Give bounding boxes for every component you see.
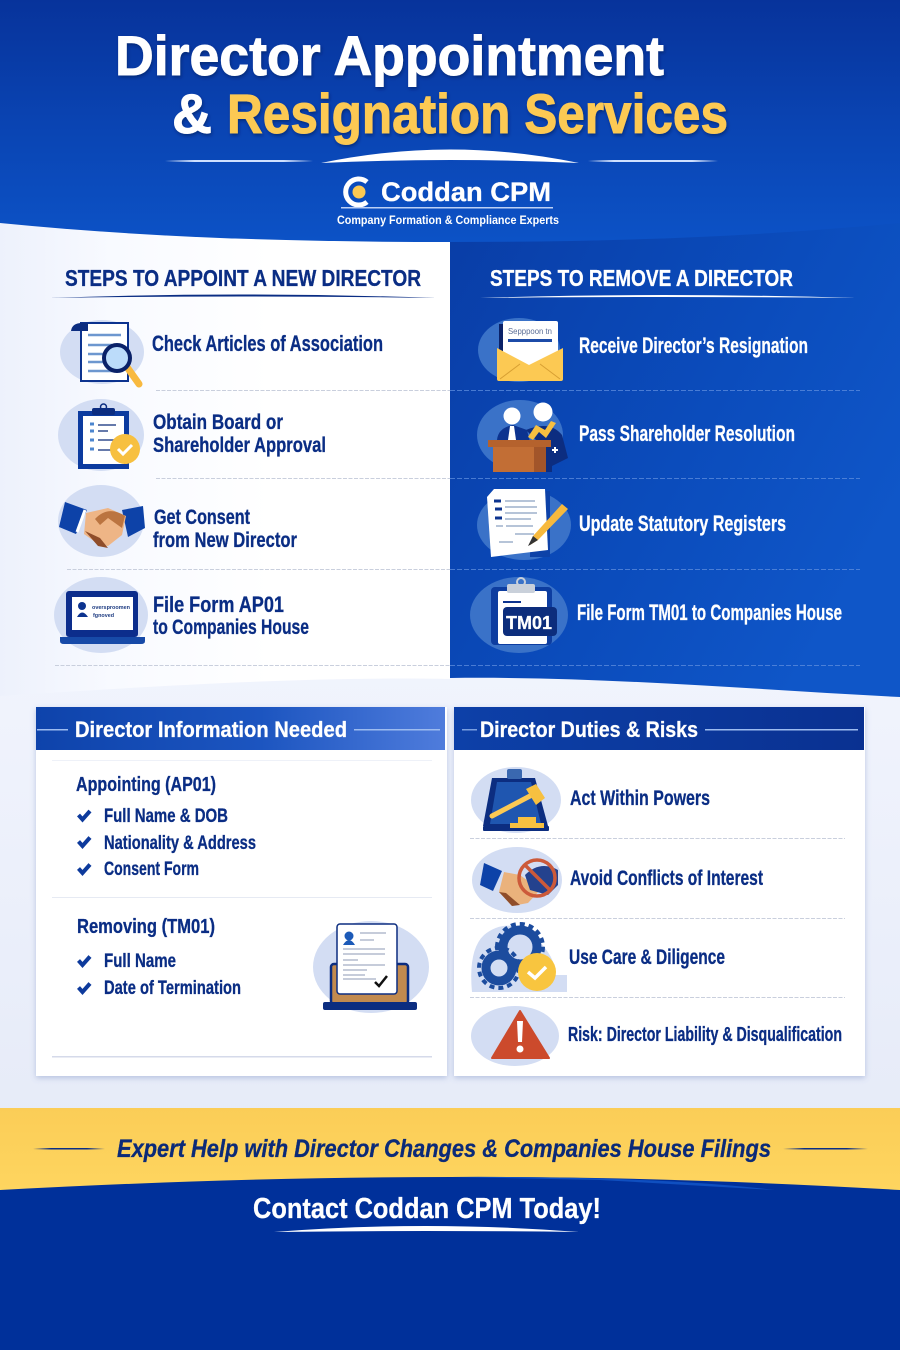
icon: laptop form: fgnoved xyxy=(93,613,114,619)
title line 2: Resignation Services xyxy=(227,82,728,145)
text: act within powers: Act Within Powers xyxy=(570,787,710,810)
text: obtain approval xyxy=(153,410,326,457)
checklist: appointing: Nationality & Address xyxy=(104,833,256,854)
icon: laptop form: oversproomen xyxy=(92,605,131,611)
panel: director information needed xyxy=(36,707,447,1076)
banner: expert help: Expert Help with Director Changes & Companies House Filings xyxy=(117,1135,771,1163)
panel header xyxy=(454,707,864,750)
text: get consent xyxy=(153,505,297,552)
icon: TM01 clipboard xyxy=(470,577,568,653)
subheading: removing: Removing (TM01) xyxy=(77,916,215,938)
text: pass resolution: Pass Shareholder Resolution xyxy=(579,421,795,446)
heading: remove: STEPS TO REMOVE A DIRECTOR xyxy=(490,265,793,291)
checklist: appointing: Consent Form xyxy=(104,859,199,880)
icon: document and magnifier xyxy=(60,320,144,384)
call to action: Contact Coddan CPM Today! xyxy=(253,1193,601,1225)
footer blue xyxy=(0,1170,900,1350)
panel header: Director Duties & Risks xyxy=(480,717,698,742)
icon: envelope: Sepppoon tn xyxy=(508,326,552,336)
text: obtain approval: Obtain Board or xyxy=(153,410,283,434)
text: get consent: from New Director xyxy=(153,528,297,552)
panel header: Director Information Needed xyxy=(75,717,347,742)
checklist: removing: Full Name xyxy=(104,951,176,972)
icon: laptop form xyxy=(54,577,148,653)
title xyxy=(115,24,728,145)
icon: TM01 clipboard: TM01 xyxy=(506,613,552,633)
text: obtain approval: Shareholder Approval xyxy=(153,433,326,457)
background: light lower section xyxy=(0,660,900,1130)
logo wordmark: Coddan CPM xyxy=(381,177,551,207)
card background xyxy=(454,707,865,1076)
text: use care: Use Care & Diligence xyxy=(569,946,725,969)
text: file AP01: to Companies House xyxy=(153,615,309,639)
header background xyxy=(0,0,900,242)
logo tagline: Company Formation & Compliance Experts xyxy=(337,213,559,227)
icon: CV on laptop xyxy=(313,921,429,1013)
text: receive resignation: Receive Director’s Resignation xyxy=(579,333,808,358)
panel: director duties and risks xyxy=(454,707,865,1076)
heading: appoint: STEPS TO APPOINT A NEW DIRECTOR xyxy=(65,265,421,291)
panel: appoint steps background xyxy=(0,215,450,696)
checklist: appointing xyxy=(78,806,256,880)
icon: warning triangle xyxy=(471,1006,559,1066)
checklist: removing xyxy=(78,951,241,999)
text: file AP01: File Form AP01 xyxy=(153,592,284,617)
panel: steps to remove xyxy=(450,265,860,666)
text: file AP01 xyxy=(153,592,309,639)
title ampersand: & xyxy=(172,82,212,145)
text: update registers: Update Statutory Registers xyxy=(579,511,786,536)
icon: handshake with prohibition xyxy=(472,847,562,913)
icon: shareholders at podium xyxy=(477,400,568,472)
panel: remove steps background xyxy=(450,215,900,697)
banner: expert help xyxy=(0,1108,900,1190)
card background xyxy=(36,707,447,1076)
icon: handshake xyxy=(58,485,145,557)
text: check articles: Check Articles of Association xyxy=(152,331,383,356)
logo: Coddan CPM xyxy=(337,177,559,227)
text: get consent: Get Consent xyxy=(154,505,250,529)
title divider xyxy=(165,150,718,163)
icon: gears and check xyxy=(471,924,567,992)
icon: gavel xyxy=(471,767,561,833)
icon: register and pen xyxy=(477,489,571,560)
icon: clipboard approval xyxy=(58,399,144,471)
checklist: appointing: Full Name & DOB xyxy=(104,806,228,827)
text: avoid conflicts: Avoid Conflicts of Interest xyxy=(570,867,763,890)
panel header xyxy=(36,707,445,750)
checklist: removing: Date of Termination xyxy=(104,978,241,999)
logo mark xyxy=(346,179,367,205)
subheading: appointing: Appointing (AP01) xyxy=(76,774,216,796)
icon: envelope xyxy=(478,318,563,382)
title line 1: Director Appointment xyxy=(115,24,664,87)
panel: steps to appoint xyxy=(50,265,450,666)
